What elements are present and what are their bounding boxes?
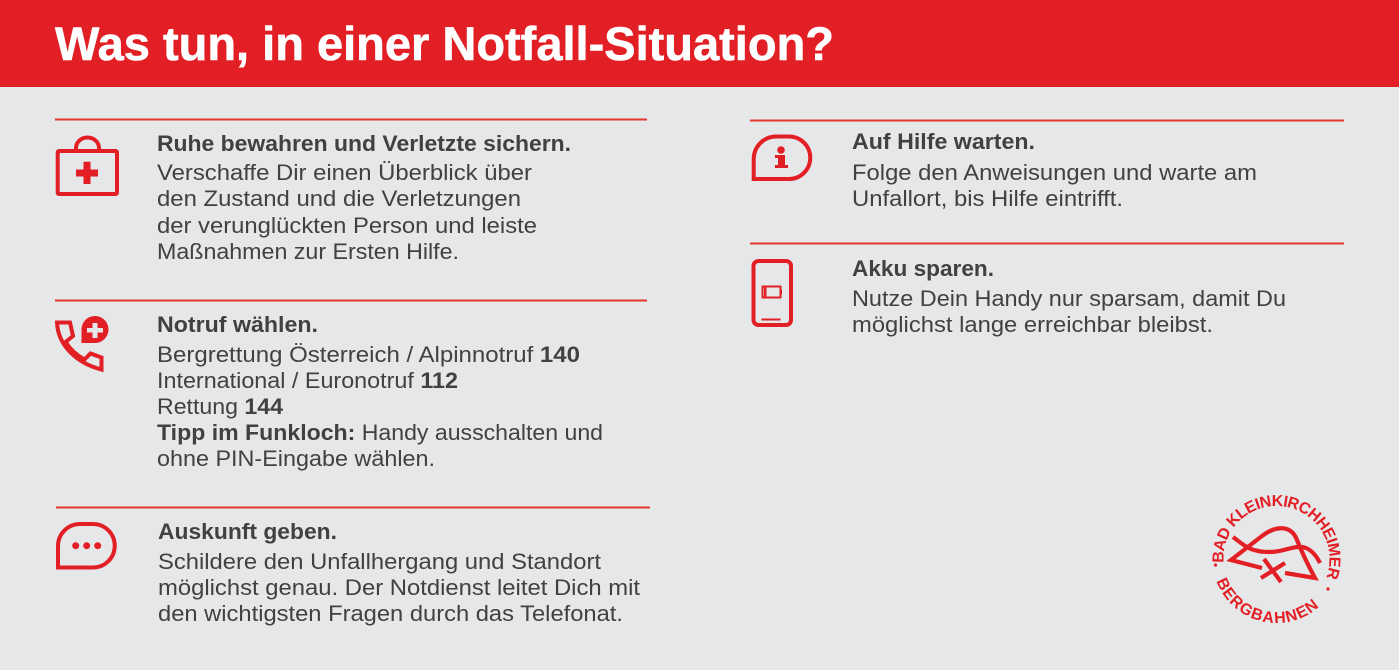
icon: phone with plus — [57, 316, 108, 370]
text block: der verunglückten Person und leiste — [157, 213, 537, 238]
text block: emergency numbers: International / Euronotruf 112 — [157, 368, 458, 393]
text block: emergency numbers: ohne PIN-Eingabe wählen. — [157, 446, 435, 471]
text block — [158, 549, 641, 626]
text block: Maßnahmen zur Ersten Hilfe. — [157, 239, 459, 264]
text block: den Zustand und die Verletzungen — [157, 186, 521, 211]
text block: Unfallort, bis Hilfe eintrifft. — [852, 186, 1123, 211]
icon: first aid kit — [58, 138, 117, 194]
text block: emergency numbers: Tipp im Funkloch: Handy ausschalten und — [157, 420, 603, 445]
text block: emergency numbers: Bergrettung Österreich / Alpinnotruf 140 — [157, 342, 580, 367]
heading: Notruf wählen. — [157, 312, 318, 337]
text block — [852, 286, 1286, 337]
text block: den wichtigsten Fragen durch das Telefonat. — [158, 601, 623, 626]
title: Was tun, in einer Notfall-Situation? — [55, 17, 834, 70]
header band — [0, 0, 1399, 87]
text block: emergency numbers: Rettung 144 — [157, 394, 283, 419]
text block: Schildere den Unfallhergang und Standort — [158, 549, 602, 574]
icon: speech bubble with dots — [58, 524, 115, 568]
heading: Akku sparen. — [852, 256, 994, 281]
text block: emergency numbers — [157, 342, 603, 471]
text block: möglichst lange erreichbar bleibst. — [852, 312, 1213, 337]
text block: Folge den Anweisungen und warte am — [852, 160, 1257, 185]
panel: Akku sparen — [750, 244, 1344, 337]
logo: Bad Kleinkirchheimer Bergbahnen: BERGBAHNEN — [1216, 577, 1318, 624]
text block — [852, 160, 1257, 211]
heading: Ruhe bewahren und Verletzte sichern. — [157, 131, 571, 156]
text block: Nutze Dein Handy nur sparsam, damit Du — [852, 286, 1286, 311]
panel: Ruhe bewahren — [55, 120, 647, 264]
text block: Verschaffe Dir einen Überblick über — [157, 160, 533, 185]
text block: möglichst genau. Der Notdienst leitet Dich mit — [158, 575, 641, 600]
logo: Bad Kleinkirchheimer Bergbahnen: BAD KLEINKIRCHHEIMER — [1212, 495, 1341, 580]
panel: Auskunft geben — [56, 508, 650, 626]
icon: info bubble — [754, 136, 810, 179]
panel: Notruf wählen — [55, 300, 647, 471]
text block — [157, 160, 537, 264]
heading: Auskunft geben. — [158, 519, 337, 544]
heading: Auf Hilfe warten. — [852, 129, 1035, 154]
icon: phone with low battery — [754, 261, 791, 325]
panel: Auf Hilfe warten — [750, 120, 1344, 211]
logo: Bad Kleinkirchheimer Bergbahnen — [1212, 495, 1341, 624]
